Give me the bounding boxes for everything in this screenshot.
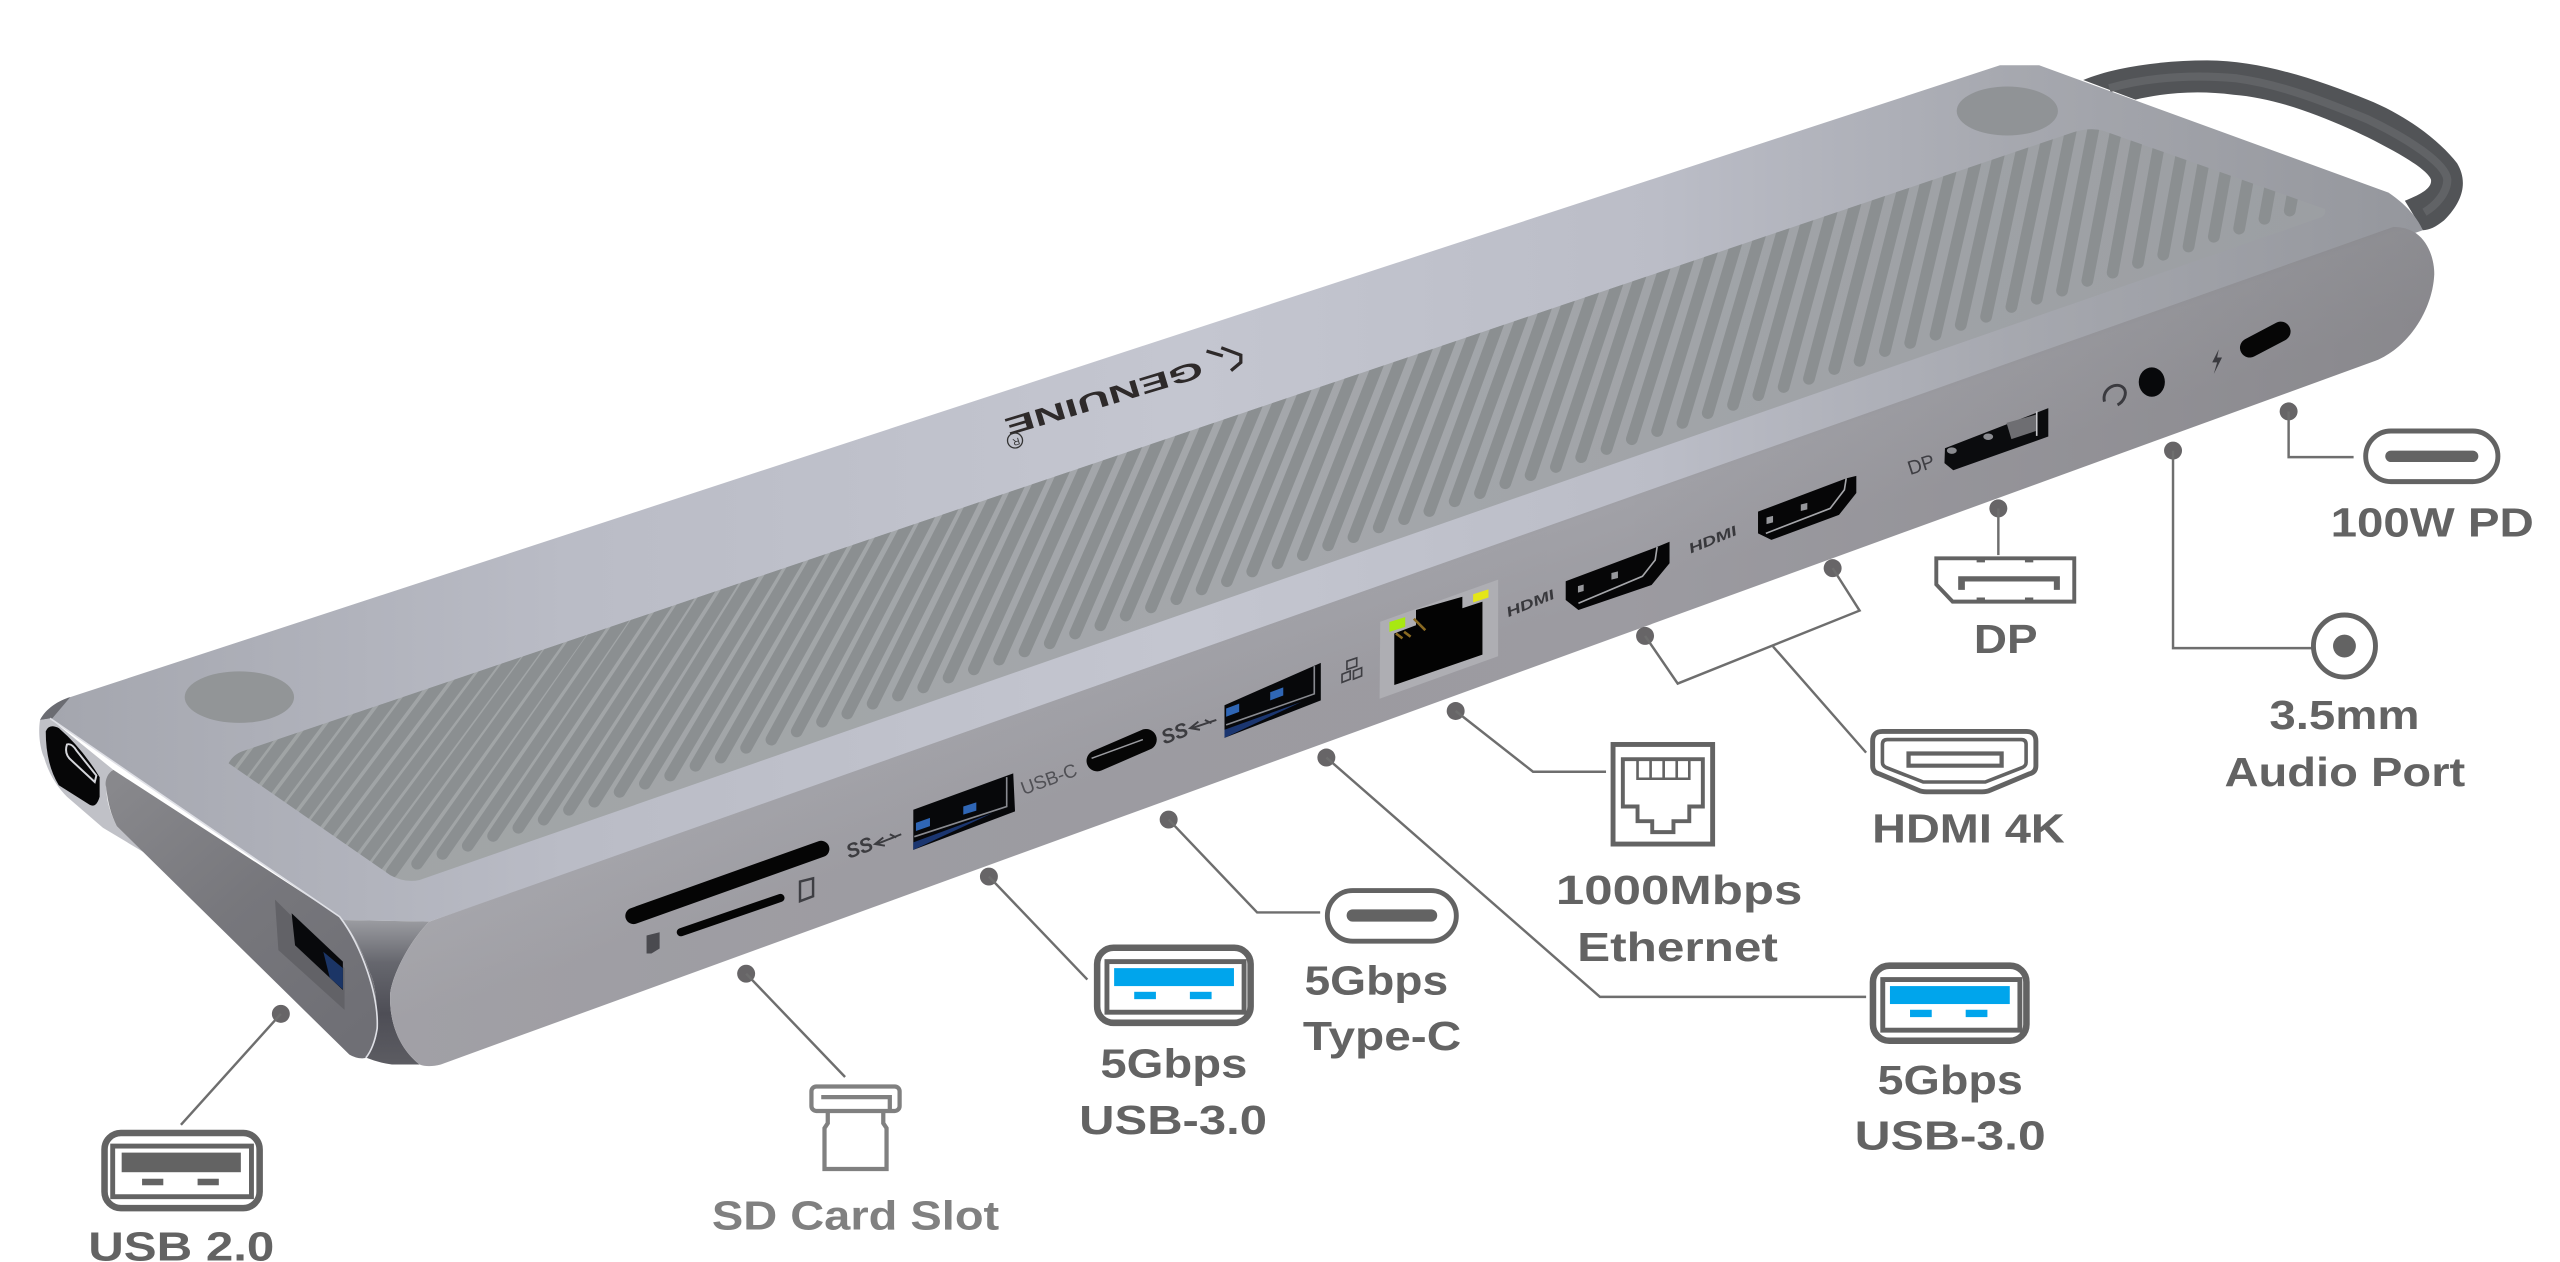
headphone glyph — [2104, 385, 2125, 405]
usb 2.0 port opening — [292, 913, 343, 990]
label: 5Gbps: 5Gbps — [1100, 1041, 1247, 1087]
rubber mat — [228, 129, 2298, 881]
docking station device — [39, 0, 2463, 1066]
callout: audio port — [2164, 442, 2466, 795]
registered mark: R — [1011, 435, 1021, 447]
callout: hdmi 4k — [1636, 559, 2065, 851]
callout: dp — [1936, 499, 2074, 662]
micro sd slot — [681, 898, 780, 932]
usb 3.0 port 1 — [913, 773, 1015, 850]
micro sd glyph — [647, 932, 660, 953]
ethernet port — [1380, 580, 1498, 699]
network glyph — [1342, 658, 1362, 682]
usb 2.0 port tongue — [323, 952, 343, 989]
left foot circle — [185, 671, 294, 723]
callout: sd card slot — [712, 965, 1000, 1238]
front face — [390, 227, 2434, 1066]
superspeed arrow 1 — [875, 834, 901, 846]
end panel — [106, 770, 377, 1058]
label: 100w pd: 100W PD — [2331, 500, 2534, 546]
icon: usb 3.0 — [1097, 948, 1251, 1023]
callout: 100w pd — [2280, 402, 2534, 546]
label: Type-C: Type-C — [1303, 1013, 1461, 1059]
label: 1000Mbps: 1000Mbps — [1556, 867, 1802, 913]
label: Ethernet: Ethernet — [1577, 924, 1778, 970]
usb-c port — [1092, 740, 1146, 761]
callout: 5Gbps USB-3.0 left — [980, 868, 1267, 1143]
icon: usb-c pd — [2366, 431, 2498, 482]
top left corner shade — [40, 697, 70, 720]
callout: 5Gbps USB-3.0 right — [1317, 749, 2046, 1158]
label: sd card slot: SD Card Slot — [712, 1192, 1000, 1238]
callout: ethernet — [1447, 702, 1802, 970]
dp label: DP — [1905, 451, 1938, 480]
displayport port — [1944, 408, 2048, 470]
brand logo text: GENUINE — [1001, 354, 1206, 440]
label: 3.5mm: 3.5mm — [2269, 692, 2420, 738]
right foot circle — [1957, 87, 2058, 136]
icon: hdmi — [1873, 731, 2036, 792]
superspeed label 1: SS — [843, 833, 877, 863]
usb-c label: USB-C — [1018, 759, 1080, 799]
sd card slot — [633, 849, 821, 916]
superspeed label 2: SS — [1158, 719, 1192, 749]
hdmi label 1: HDMI — [1504, 585, 1558, 620]
callout: 5Gbps Type-C — [1160, 811, 1461, 1059]
icon: type-c — [1327, 891, 1456, 941]
label: USB-3.0: USB-3.0 — [1079, 1097, 1267, 1143]
power delivery usb-c port — [2250, 331, 2281, 348]
usb 3.0 port 2 — [1224, 663, 1321, 738]
lightning glyph — [2212, 349, 2222, 374]
label: audio port: Audio Port — [2224, 749, 2466, 795]
hdmi label 2: HDMI — [1686, 522, 1740, 556]
left end metal frame — [39, 718, 144, 852]
label: dp: DP — [1974, 616, 2038, 662]
usb 2.0 port frame — [275, 900, 345, 1010]
label: USB-3.0: USB-3.0 — [1855, 1112, 2046, 1158]
hdmi port 1 — [1566, 542, 1670, 610]
superspeed arrow 2 — [1190, 720, 1216, 730]
hdmi port 2 — [1758, 476, 1856, 540]
icon: displayport — [1936, 558, 2074, 602]
callout: usb 2.0 — [88, 1005, 290, 1262]
cable — [2083, 60, 2463, 230]
icon: rj45 — [1613, 744, 1713, 844]
registered mark — [1008, 433, 1023, 448]
icon: usb 2.0 — [105, 1133, 260, 1208]
icon: audio jack — [2313, 615, 2375, 677]
end panel highlight — [50, 718, 377, 1058]
usb-c port on left end — [46, 726, 100, 806]
top surface — [40, 65, 2423, 922]
icon: usb 3.0 — [1873, 966, 2026, 1041]
label: hdmi 4k: HDMI 4K — [1872, 805, 2065, 851]
brand logo icon — [1207, 348, 1241, 371]
sd glyph — [800, 878, 813, 901]
icon: sd card — [811, 1086, 900, 1169]
audio jack — [2139, 367, 2165, 397]
front face shading — [390, 227, 2434, 1066]
chamfer — [343, 920, 429, 1064]
label: 5Gbps: 5Gbps — [1878, 1057, 2023, 1103]
usb-c port tongue — [66, 744, 96, 782]
label: 5Gbps: 5Gbps — [1304, 957, 1448, 1003]
